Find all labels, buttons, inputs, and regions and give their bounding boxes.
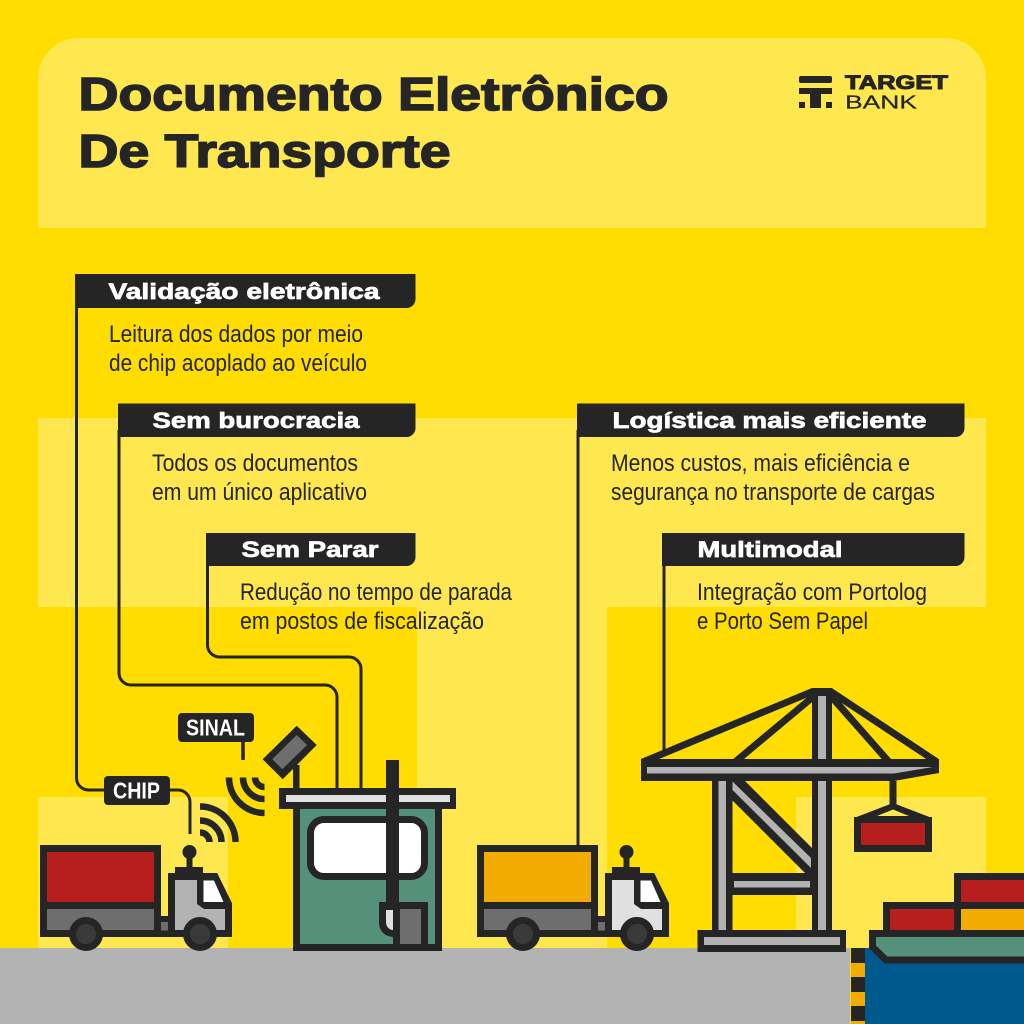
section: Sem burocracia	[118, 404, 416, 506]
label: CHIP: CHIP	[113, 778, 160, 804]
section: Validação eletrônica: Validação eletrônica	[108, 279, 380, 304]
section: Sem burocracia: Todos os documentos	[152, 450, 358, 477]
section: Logística mais eficiente: segurança no transporte de cargas	[611, 479, 935, 506]
section: Sem Parar: em postos de fiscalização	[240, 608, 484, 635]
icon: truck with orange cargo	[477, 845, 666, 948]
section: Validação eletrônica: de chip acoplado ao veículo	[109, 350, 367, 377]
quay hazard stripe	[851, 948, 865, 1024]
section: Sem burocracia: em um único aplicativo	[152, 479, 367, 506]
title	[78, 68, 668, 177]
label: SINAL: SINAL	[186, 714, 245, 740]
connector lines	[76, 300, 664, 850]
ship with containers	[872, 873, 1024, 960]
logo: Target Bank: TARGET	[845, 73, 949, 94]
section: Sem Parar: Sem Parar	[242, 537, 379, 562]
water	[865, 948, 1024, 1024]
section: Multimodal: Integração com Portolog	[697, 579, 927, 606]
section: Logística mais eficiente: Logística mais eficiente	[612, 408, 926, 433]
section: Validação eletrônica	[75, 274, 416, 377]
title: De Transporte	[78, 125, 450, 177]
logo: Target Bank	[799, 73, 949, 112]
section: Validação eletrônica: Leitura dos dados por meio	[109, 321, 363, 348]
section: Sem Parar: Redução no tempo de parada	[240, 579, 513, 606]
toll booth	[279, 760, 456, 951]
section: Multimodal: Multimodal	[698, 537, 842, 562]
port crane	[641, 688, 939, 952]
section: Logística mais eficiente	[577, 404, 964, 506]
logo: Target Bank: BANK	[845, 92, 918, 112]
title: Documento Eletrônico	[78, 68, 668, 120]
icon: camera sensor	[263, 726, 317, 790]
crane hook with red container	[854, 781, 932, 852]
section: Multimodal: e Porto Sem Papel	[697, 608, 868, 635]
section: Multimodal	[662, 533, 964, 635]
section: Logística mais eficiente: Menos custos, mais eficiência e	[611, 450, 910, 477]
icon: truck with red cargo	[40, 845, 229, 948]
icon: wifi signal from truck	[200, 806, 236, 842]
icon: wifi signal to camera	[229, 778, 264, 813]
section: Sem Parar	[206, 533, 513, 635]
section: Sem burocracia: Sem burocracia	[152, 408, 360, 433]
ground	[0, 948, 850, 1024]
